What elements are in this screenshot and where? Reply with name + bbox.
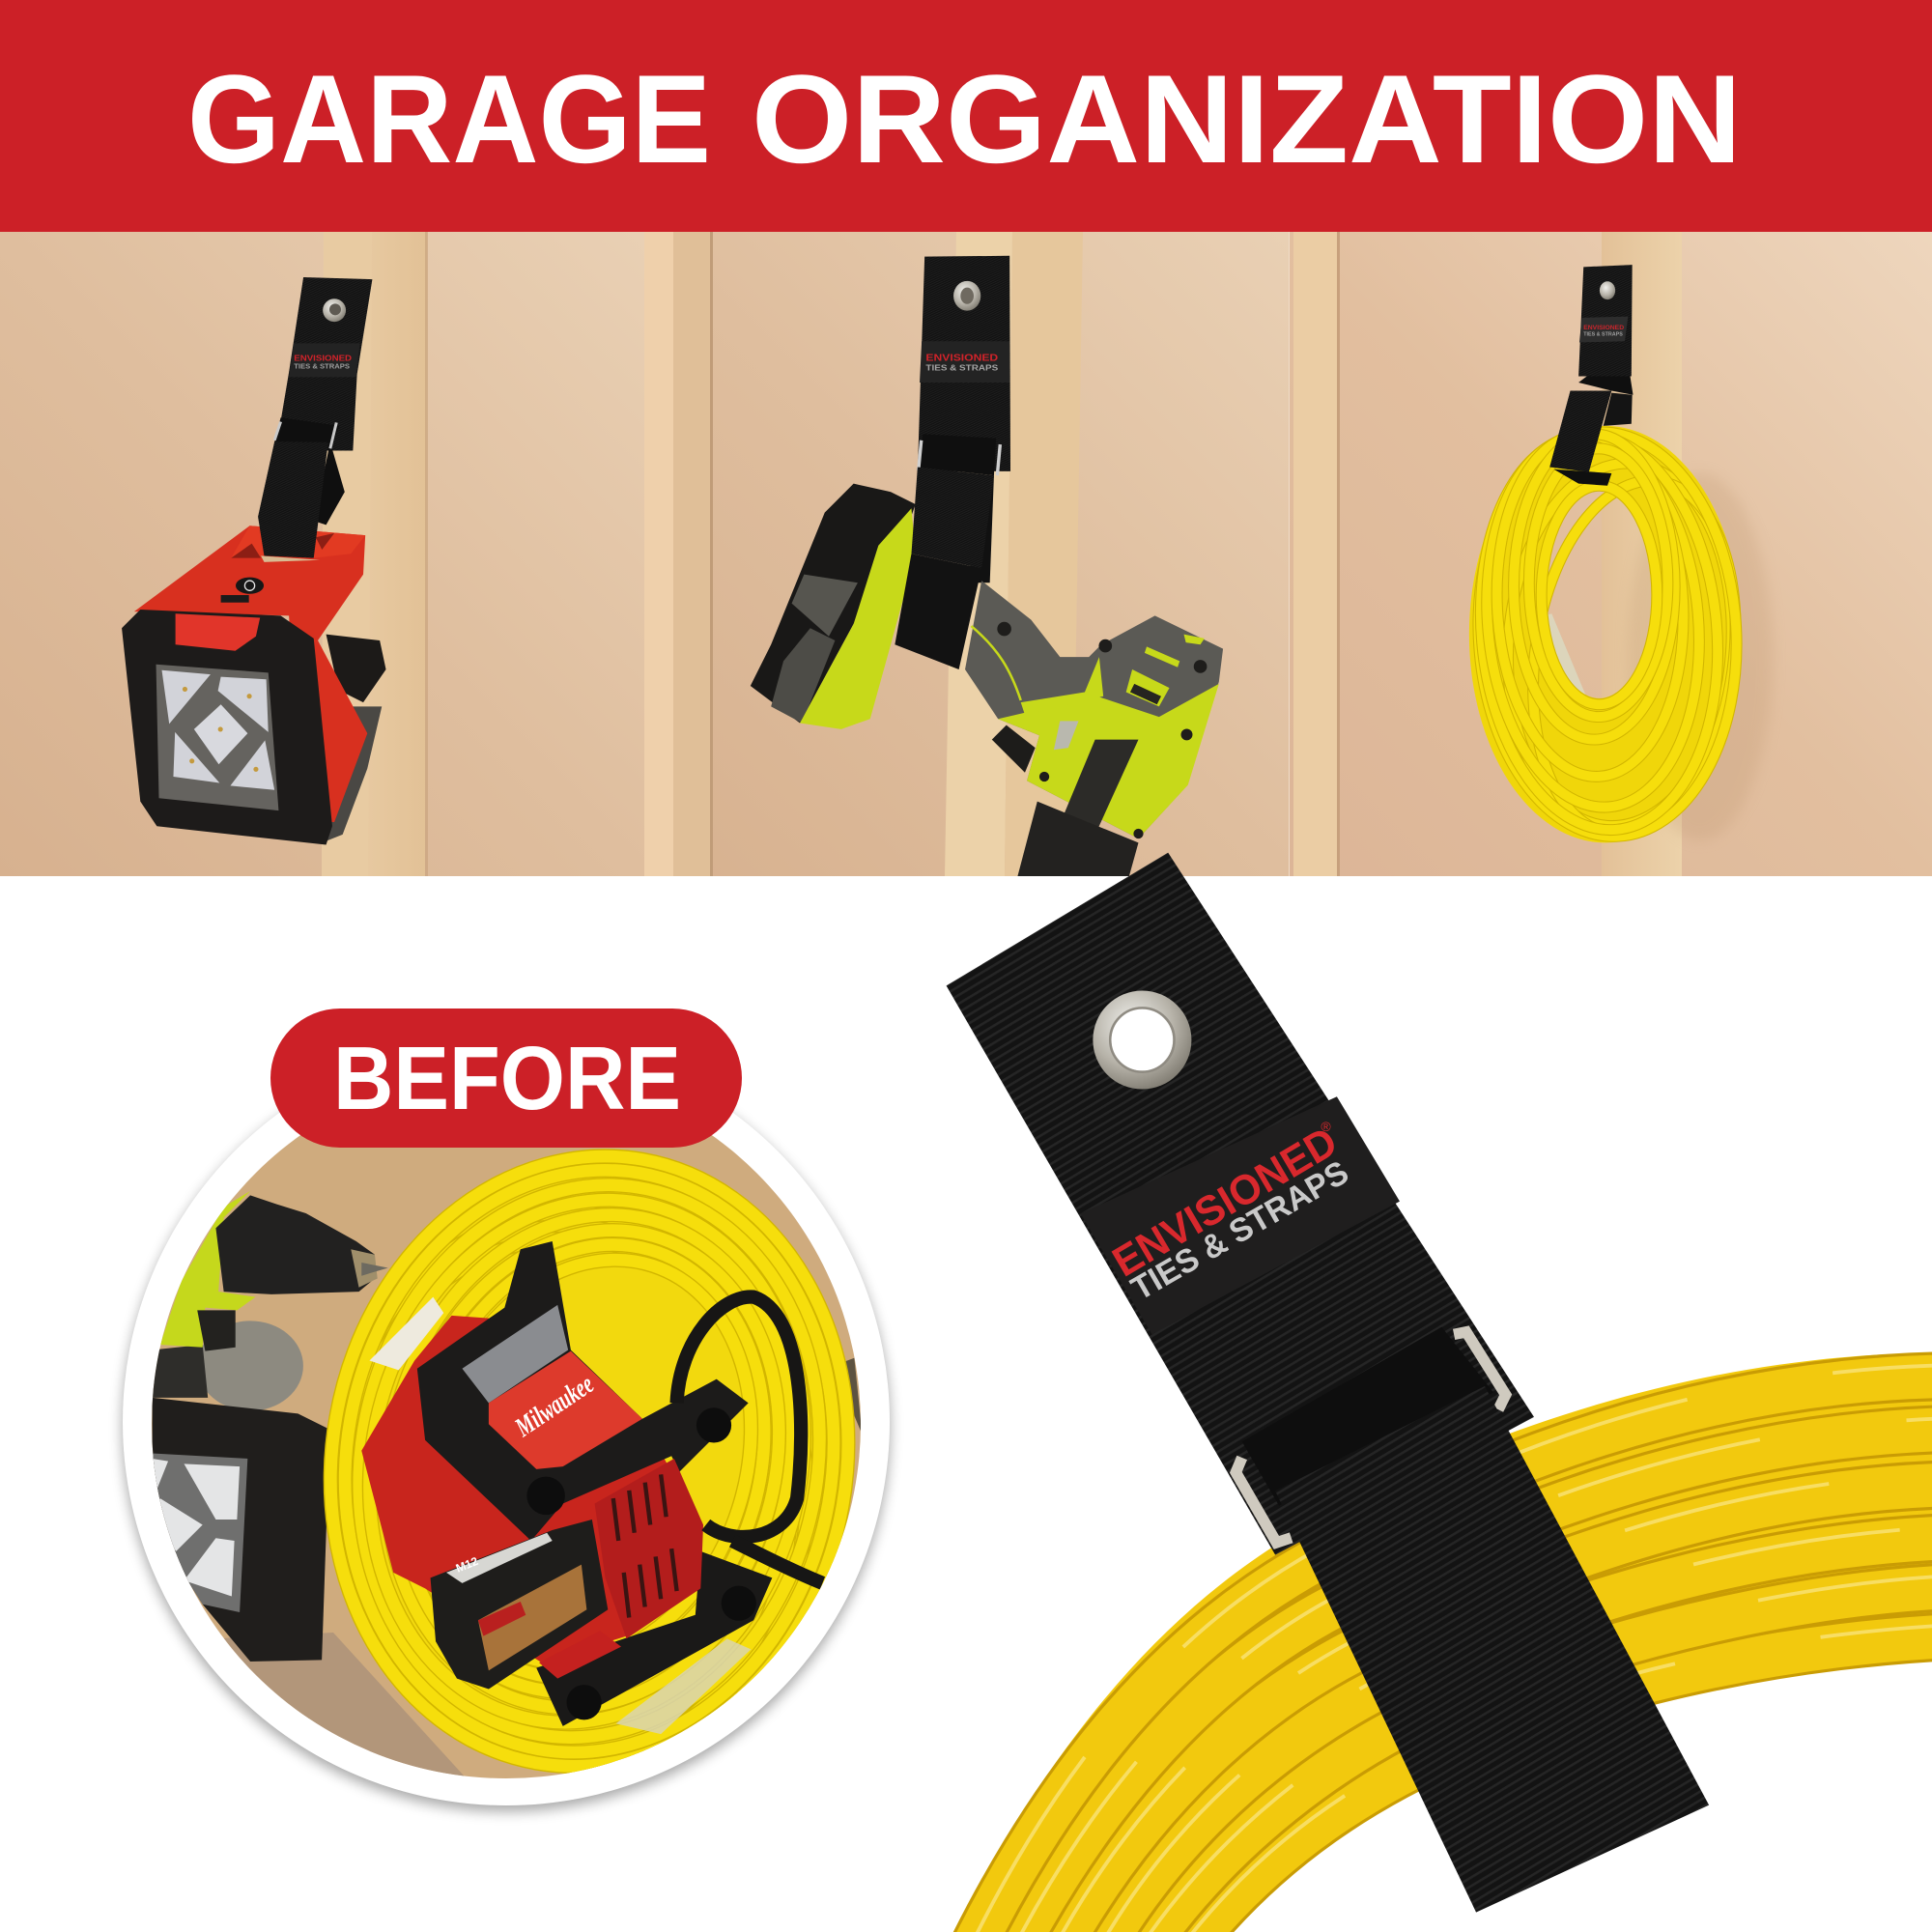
plug end xyxy=(616,1638,751,1734)
battery xyxy=(751,484,916,729)
before photo contents xyxy=(145,1063,903,1816)
before photo circle xyxy=(123,1038,903,1816)
strap label: ENVISIONED xyxy=(294,354,352,363)
connector at right xyxy=(833,1358,863,1435)
woven label: ENVISIONED xyxy=(1105,1119,1346,1286)
panel: extension cord hung on stud xyxy=(1290,232,1932,876)
work light with strap xyxy=(122,277,386,845)
title xyxy=(187,48,1742,189)
front strap xyxy=(1275,1386,1709,1913)
yellow cord bundle xyxy=(955,1352,1932,1932)
before text: BEFORE xyxy=(333,1028,681,1128)
black power cord xyxy=(677,1297,822,1583)
Milwaukee logo: Milwaukee xyxy=(510,1369,600,1443)
strap label: ENVISIONED xyxy=(925,353,998,363)
light panels xyxy=(162,670,274,790)
plug xyxy=(1548,613,1585,695)
strap label xyxy=(1579,317,1628,343)
metal rings xyxy=(1236,1332,1506,1543)
woven label: TIES & STRAPS xyxy=(1125,1154,1355,1308)
cord coil with strap xyxy=(1464,265,1757,846)
jumbled yellow cord xyxy=(275,1107,903,1816)
woven label: ® xyxy=(1321,1119,1331,1134)
strap label xyxy=(289,343,360,377)
red work light on the coil xyxy=(361,1241,772,1726)
strap label xyxy=(920,341,1009,383)
drill on the left xyxy=(153,1191,388,1411)
strap label: TIES & STRAPS xyxy=(1583,332,1623,338)
light on the left xyxy=(153,1398,329,1662)
title banner xyxy=(0,0,1932,232)
backing strap xyxy=(947,853,1534,1555)
main close-up: strap holding yellow cord xyxy=(947,853,1932,1932)
strap label: TIES & STRAPS xyxy=(925,363,999,373)
metal grommet xyxy=(1093,991,1191,1090)
title: GARAGE xyxy=(187,48,711,189)
M12 battery: M12 xyxy=(454,1554,480,1576)
strap label: ENVISIONED xyxy=(1583,325,1624,331)
woven label xyxy=(1081,1096,1400,1334)
before pill label xyxy=(270,1009,742,1148)
drill handle and head xyxy=(965,581,1223,838)
M12 battery xyxy=(431,1520,608,1690)
drill with strap xyxy=(751,256,1223,880)
panel: cordless drill hung on stud xyxy=(644,232,1289,880)
strap label: TIES & STRAPS xyxy=(294,361,350,370)
panel: work light hung on stud xyxy=(0,232,644,876)
velcro band xyxy=(1242,1327,1493,1506)
title: ORGANIZATION xyxy=(752,48,1742,189)
cord tag xyxy=(369,1297,443,1370)
hook strap around drill xyxy=(895,468,994,669)
